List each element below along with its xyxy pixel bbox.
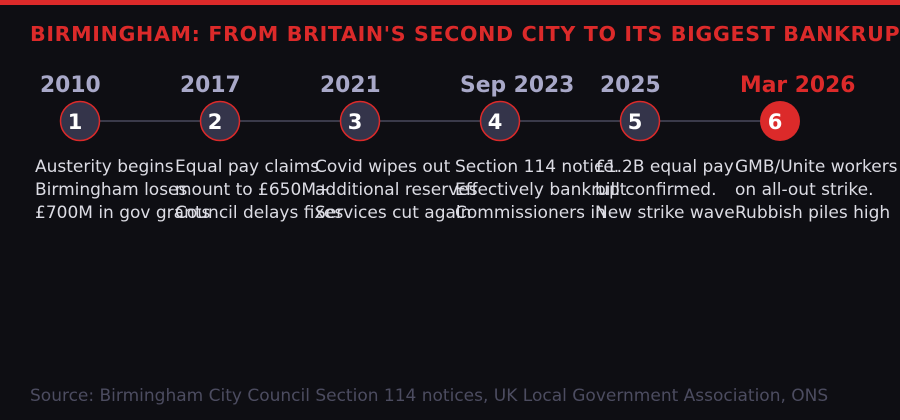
event 2 bbox=[175, 73, 343, 223]
event 4 bbox=[455, 73, 627, 223]
event 3: additional reserves bbox=[315, 180, 478, 200]
top accent bar bbox=[0, 0, 900, 5]
event 6 highlighted: on all-out strike. bbox=[735, 180, 873, 200]
event 6 highlighted: Mar 2026 bbox=[740, 73, 855, 98]
event 1: £700M in gov grants bbox=[35, 203, 211, 223]
event 2: mount to £650M+ bbox=[175, 180, 330, 200]
event 4: 4 bbox=[488, 110, 502, 134]
event 3: Covid wipes out bbox=[315, 157, 451, 177]
event 6 highlighted: Rubbish piles high bbox=[735, 203, 890, 223]
event 3: 3 bbox=[348, 110, 362, 134]
event 2: Council delays fixes bbox=[175, 203, 343, 223]
event 3: Services cut again bbox=[315, 203, 471, 223]
event 2: 2017 bbox=[180, 73, 241, 98]
event 3 bbox=[315, 73, 478, 223]
event 6 highlighted bbox=[735, 73, 898, 223]
source note: Source: Birmingham City Council Section 114 notices, UK Local Government Association, ONS bbox=[30, 386, 828, 406]
event 1: Birmingham loses bbox=[35, 180, 188, 200]
event 1: 2010 bbox=[40, 73, 101, 98]
event 5: £1.2B equal pay bbox=[595, 157, 734, 177]
event 4: Commissioners in bbox=[455, 203, 606, 223]
event 1: 1 bbox=[68, 110, 82, 134]
timeline line bbox=[80, 120, 780, 122]
event 2: 2 bbox=[208, 110, 222, 134]
event 4: Effectively bankrupt bbox=[455, 180, 627, 200]
event 4: Section 114 notice. bbox=[455, 157, 619, 177]
event 1: Austerity begins bbox=[35, 157, 174, 177]
event 1 bbox=[35, 73, 211, 223]
event 6 highlighted: 6 bbox=[768, 110, 782, 134]
event 5: 2025 bbox=[600, 73, 661, 98]
event 4: Sep 2023 bbox=[460, 73, 574, 98]
event 6 highlighted: GMB/Unite workers bbox=[735, 157, 898, 177]
event 3: 2021 bbox=[320, 73, 381, 98]
event 5 bbox=[595, 73, 735, 223]
event 2: Equal pay claims bbox=[175, 157, 319, 177]
event 5: bill confirmed. bbox=[595, 180, 716, 200]
event 5: New strike wave bbox=[595, 203, 735, 223]
event 5: 5 bbox=[628, 110, 642, 134]
